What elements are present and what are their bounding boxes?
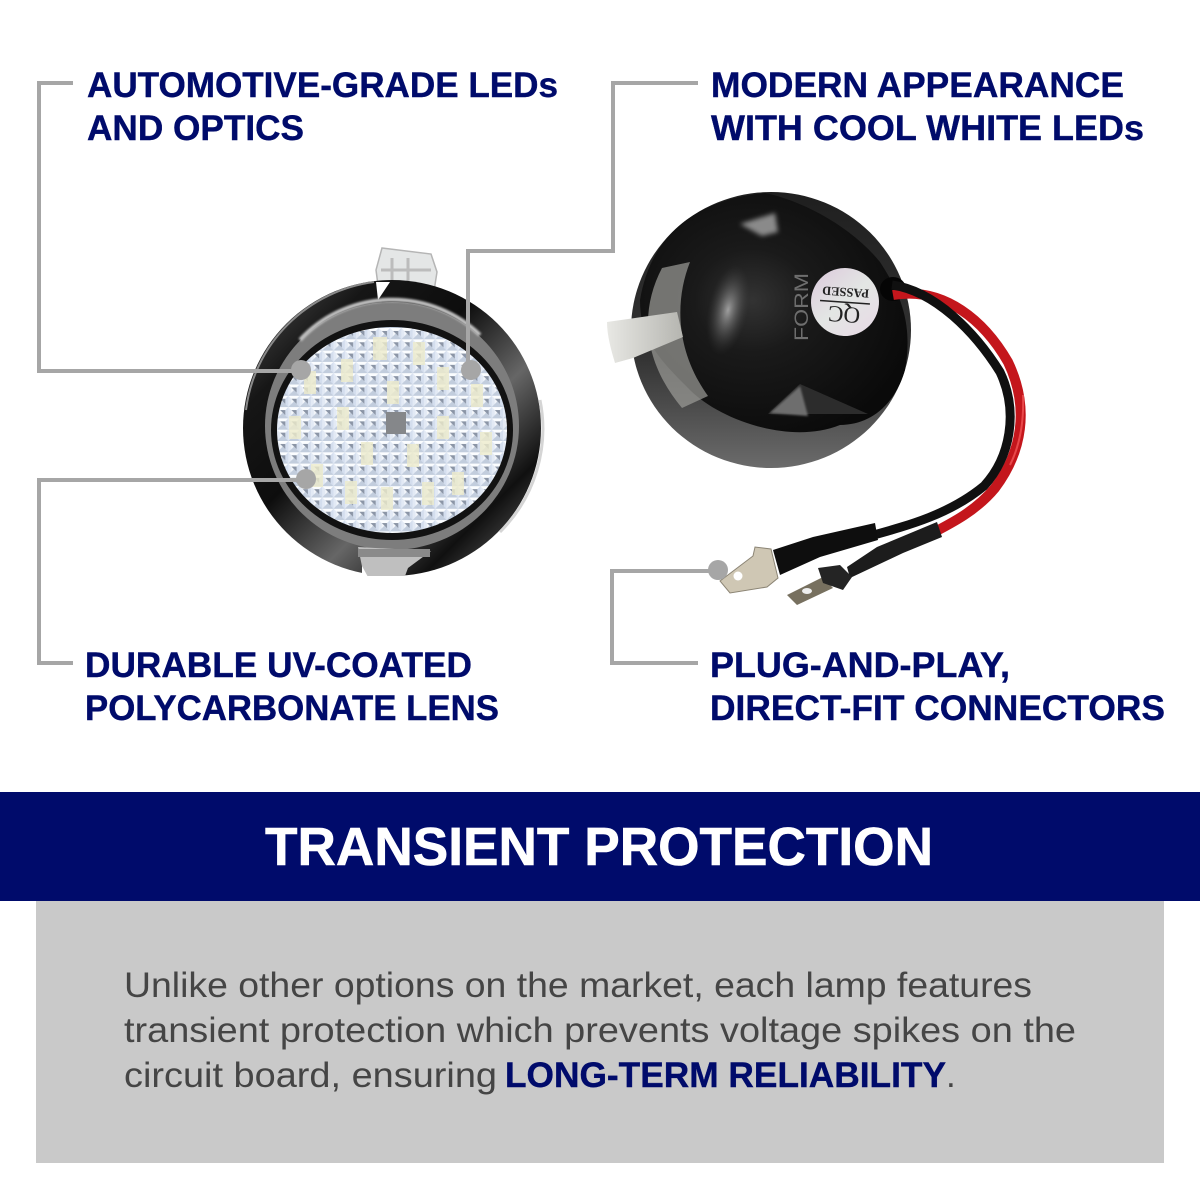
spade terminal small bbox=[787, 577, 833, 605]
heading: durable lens: POLYCARBONATE LENS bbox=[85, 689, 499, 728]
black wire bbox=[870, 285, 1010, 536]
leader line: polycarbonate lens bbox=[39, 469, 316, 663]
body text: circuit board, ensuring bbox=[124, 1056, 497, 1095]
QC passed sticker bbox=[809, 266, 881, 338]
heading: automotive-grade LEDs and optics bbox=[87, 66, 558, 148]
white notch by top tab bbox=[376, 282, 390, 300]
heading: durable lens: DURABLE UV-COATED bbox=[85, 646, 472, 685]
lamp: front view with lit lens bbox=[243, 248, 543, 577]
body text: . bbox=[946, 1056, 956, 1095]
red wire bbox=[893, 294, 1021, 537]
body text: Unlike other options on the market, each lamp features bbox=[124, 966, 1032, 1005]
QC passed sticker: PASSED bbox=[822, 283, 870, 301]
wire grommet bbox=[880, 277, 906, 301]
LED chips bbox=[289, 337, 492, 510]
FORM mark: FORM bbox=[792, 273, 813, 341]
heading: automotive-grade LEDs and optics: AUTOMOTIVE-GRADE LEDs bbox=[87, 66, 558, 105]
body text: transient protection which prevents voltage spikes on the bbox=[124, 1011, 1076, 1050]
banner: transient protection: TRANSIENT PROTECTION bbox=[265, 817, 933, 877]
heading: modern appearance: MODERN APPEARANCE bbox=[711, 66, 1124, 105]
leader line: connectors bbox=[612, 560, 728, 663]
QC passed sticker: QC bbox=[827, 301, 861, 328]
heading: plug-and-play: DIRECT-FIT CONNECTORS bbox=[710, 689, 1165, 728]
leader line: cool white LEDs bbox=[461, 83, 698, 380]
panel: description background bbox=[36, 901, 1164, 1163]
heat shrink sleeve large bbox=[773, 523, 878, 575]
spade terminal large bbox=[720, 547, 778, 593]
clear tab bbox=[607, 312, 683, 363]
housing rim bbox=[631, 192, 911, 468]
lamp: rear view with wiring bbox=[607, 192, 1023, 605]
dome highlights bbox=[699, 261, 757, 359]
lamp clip tab top bbox=[376, 248, 437, 304]
heat shrink sleeve small bbox=[847, 522, 942, 578]
body text bbox=[124, 966, 1076, 1095]
body text: LONG-TERM RELIABILITY bbox=[505, 1056, 946, 1095]
housing dome bbox=[640, 193, 908, 432]
banner: transient protection bbox=[0, 792, 1200, 901]
heading: modern appearance bbox=[711, 66, 1144, 148]
clip tab bottom bbox=[358, 547, 431, 576]
heading: durable lens bbox=[85, 646, 499, 728]
heading: modern appearance: WITH COOL WHITE LEDs bbox=[711, 109, 1144, 148]
heading: automotive-grade LEDs and optics: AND OPTICS bbox=[87, 109, 304, 148]
heading: plug-and-play bbox=[710, 646, 1165, 728]
heading: plug-and-play: PLUG-AND-PLAY, bbox=[710, 646, 1010, 685]
translucent side strip bbox=[648, 262, 708, 408]
clear inner collar bbox=[265, 302, 519, 550]
leader line: automotive-grade LEDs bbox=[39, 83, 311, 380]
